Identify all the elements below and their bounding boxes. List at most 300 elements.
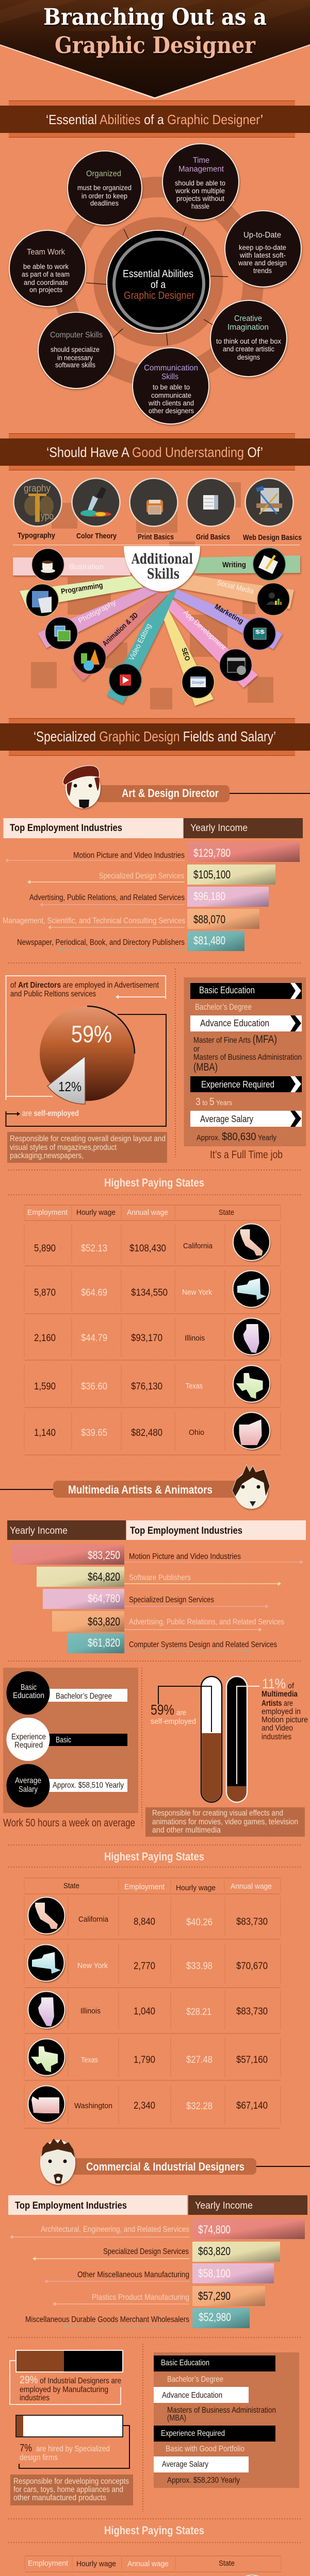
row: ohio: $82,480 xyxy=(131,1428,162,1438)
bar: computer systems: $61,820 xyxy=(88,1636,120,1649)
requirement: advance education: (MBA) xyxy=(193,1061,218,1073)
row: ohio: $39.65 xyxy=(81,1428,107,1438)
ability: computer skills xyxy=(38,312,115,388)
multimedia heading xyxy=(0,1465,270,1509)
tube: motion picture: and Video xyxy=(262,1724,293,1733)
bar chart: specialized firms share: design firms xyxy=(20,2453,58,2462)
table header: Yearly Income xyxy=(10,1526,68,1536)
row: california xyxy=(34,1224,271,1262)
skill: animation and 3d xyxy=(73,611,140,674)
skill: app development xyxy=(182,608,252,681)
ability: organized: must be organized xyxy=(77,184,132,192)
requirement: advance education xyxy=(154,2387,276,2422)
bar: software: Software Publishers xyxy=(129,1573,191,1582)
row: california: $83,730 xyxy=(236,1917,268,1927)
basics labels: Grid Basics xyxy=(196,533,230,541)
icon: grid basics xyxy=(187,478,235,527)
title: Branching Out as a xyxy=(43,4,267,30)
description box: commercial xyxy=(10,2475,133,2505)
bar: other manufacturing xyxy=(44,2263,274,2283)
bar: specialized design xyxy=(27,865,275,885)
ability: up-to-date: Up-to-Date xyxy=(243,231,281,240)
row: california: California xyxy=(183,1242,213,1250)
table header row: Hourly wage xyxy=(76,2560,116,2568)
icon: multimedia face xyxy=(232,1465,270,1509)
tube: motion picture xyxy=(226,1676,308,1802)
table header row: Hourly wage xyxy=(76,1208,116,1217)
table header: Yearly Income xyxy=(190,823,248,834)
tube: self-employed: 59% xyxy=(151,1702,174,1718)
icon: typography xyxy=(13,478,62,527)
description box: commercial: for cars, toys, home appliances and xyxy=(13,2485,123,2494)
note: working hours: Work 50 hours a week on average xyxy=(3,1817,135,1829)
bar chart: specialized firms share xyxy=(16,2415,129,2468)
section heading: good understanding: ‘Should Have A Good Understanding Of’ xyxy=(46,445,263,460)
ability: communication skills: communicate xyxy=(151,392,191,399)
requirement: salary: Approx. $58,510 Yearly xyxy=(53,1781,124,1790)
description box: art director xyxy=(7,1132,167,1163)
row: texas: 1,590 xyxy=(34,1381,56,1392)
row: texas: $27.48 xyxy=(186,2055,213,2065)
row: ohio: 1,140 xyxy=(34,1428,56,1438)
ability: computer skills: in necessary xyxy=(57,354,93,362)
bar: specialized design: Specialized Design Services xyxy=(99,872,184,880)
bar: motion picture: $129,780 xyxy=(193,846,231,859)
requirement: advance education: Masters of Business Administration xyxy=(167,2406,276,2415)
tube: self-employed: self-employed xyxy=(151,1717,196,1726)
ability: communication skills: other designers xyxy=(149,407,194,415)
bar: consulting: Management, Scientific, and Technical Consulting Services xyxy=(3,917,185,925)
table header row xyxy=(28,2559,235,2568)
basics icon row xyxy=(13,478,302,542)
description box: multimedia: Responsible for creating visual effects and xyxy=(152,1809,283,1818)
bar: publishers: Newspaper, Periodical, Book, and Directory Publishers xyxy=(17,938,185,947)
income table: commercial xyxy=(8,2195,307,2328)
ability: time management: should be able to xyxy=(175,179,225,187)
bar: specialized design xyxy=(43,1589,269,1609)
tube: motion picture: employed in xyxy=(262,1707,301,1716)
table header: Top Employment Industries xyxy=(15,2200,127,2211)
ability: creative imagination xyxy=(210,300,287,377)
requirement: salary: Average Salary xyxy=(200,1114,253,1124)
bar: wholesalers: Miscellaneous Durable Goods Merchant Wholesalers xyxy=(25,2315,189,2324)
income table: multimedia xyxy=(7,1520,306,1653)
ability: up-to-date: keep up-to-date xyxy=(239,244,286,251)
bar chart: manufacturing share: employed by Manufacturing xyxy=(20,2385,108,2394)
basics labels: Print Basics xyxy=(138,533,174,541)
requirement: salary: Approx. $80,630 Yearly xyxy=(197,1131,276,1143)
requirement: basic education xyxy=(190,983,302,1012)
ability: creative imagination: Imagination xyxy=(227,323,269,332)
requirement: experience: Experience Required xyxy=(201,1079,274,1090)
row: illinois: 1,040 xyxy=(134,2006,155,2017)
skill: seo: SEO xyxy=(180,647,191,662)
ability: team work xyxy=(9,230,86,307)
bar: specialized design: $105,100 xyxy=(193,868,231,881)
requirement: experience: Basic with Good Portfolio xyxy=(166,2445,244,2453)
ability: team work: Team Work xyxy=(27,248,65,257)
skill: app development: App Development xyxy=(182,608,227,652)
requirement: basic education: Basic Education xyxy=(161,2359,209,2367)
ability: up-to-date xyxy=(225,211,301,287)
row: illinois: $44.79 xyxy=(81,1333,107,1344)
table header row: Employment xyxy=(124,1883,165,1891)
requirements panel: multimedia xyxy=(3,1668,138,1813)
ability: time management: Management xyxy=(178,165,224,174)
requirement: experience: Experience xyxy=(11,1733,46,1741)
row: texas xyxy=(28,2039,268,2077)
requirement: basic education: Bachelor’s Degree xyxy=(195,1002,252,1012)
description box: commercial: other manufactured products xyxy=(13,2494,106,2502)
requirement: basic education: Basic Education xyxy=(199,985,255,995)
skill: seo xyxy=(180,647,215,699)
row: new york: $64.69 xyxy=(81,1287,107,1298)
section heading: essential abilities xyxy=(0,100,310,138)
requirement: advance education xyxy=(190,1015,302,1073)
row: new york: New York xyxy=(182,1288,212,1297)
bar: advertising xyxy=(29,887,269,907)
description box: multimedia: and other multimedia xyxy=(152,1826,221,1835)
bar: plastics xyxy=(53,2286,265,2306)
requirement: experience: 3 to 5 Years xyxy=(195,1096,232,1108)
additional skills hub: Additional xyxy=(131,551,193,567)
basics labels: Color Theory xyxy=(76,532,117,540)
icon: commercial face xyxy=(40,2139,75,2184)
requirement: experience: Basic xyxy=(56,1736,71,1744)
bar: motion picture: Motion Picture and Video Industries xyxy=(129,1552,241,1561)
requirement: salary: Approx. $58,230 Yearly xyxy=(167,2476,240,2485)
table header row: Annual wage xyxy=(231,1882,272,1891)
row: california xyxy=(35,2575,272,2576)
ability: up-to-date: ware and design xyxy=(238,259,287,267)
row: texas: $36.60 xyxy=(81,1381,107,1392)
row: new york: $134,550 xyxy=(131,1287,168,1298)
bar chart: specialized firms share: are hired by Specialized xyxy=(36,2445,110,2453)
icon: web design basics xyxy=(246,478,293,527)
ability: computer skills: Computer Skills xyxy=(50,331,103,340)
row: texas: Texas xyxy=(81,2056,98,2064)
bar: motion picture xyxy=(11,1544,303,1565)
table header xyxy=(3,818,303,838)
section heading: good understanding xyxy=(0,433,310,470)
row: illinois xyxy=(28,1992,268,2030)
row: new york: $70,670 xyxy=(236,1961,268,1972)
table: art director states xyxy=(24,1205,281,1455)
ability: organized: in order to keep xyxy=(81,192,127,200)
table header: Top Employment Industries xyxy=(130,1526,242,1536)
row: illinois xyxy=(34,1318,271,1357)
requirement: salary xyxy=(190,1111,302,1143)
table header: Yearly Income xyxy=(195,2200,253,2211)
bar: publishers xyxy=(17,931,244,952)
skill: animation and 3d: Animation & 3D xyxy=(101,611,140,648)
skill: photography: Photography xyxy=(77,599,118,625)
bar: advertising: Advertising, Public Relations, and Related Services xyxy=(129,1618,284,1626)
table header: Top Employment Industries xyxy=(10,823,122,834)
bar: other manufacturing: Other Miscellaneous Manufacturing xyxy=(77,2270,189,2279)
bar: wholesalers: $52,980 xyxy=(199,2311,231,2324)
bar: advertising: Advertising, Public Relations, and Related Services xyxy=(29,893,185,902)
row: new york xyxy=(28,1944,268,1983)
table header row: Employment xyxy=(27,1208,68,1217)
ability: time management: Time xyxy=(193,156,209,165)
skill: marketing xyxy=(213,603,275,650)
row: new york xyxy=(34,1270,271,1309)
skill: programming: Programming xyxy=(60,581,104,596)
ability: team work: and coordinate xyxy=(24,279,68,286)
row: texas: $76,130 xyxy=(131,1381,162,1392)
requirement: salary: Salary xyxy=(19,1785,38,1794)
ability: organized xyxy=(68,151,142,225)
ability: team work: be able to work xyxy=(23,263,69,270)
requirement: salary: Average Salary xyxy=(162,2460,208,2469)
heading: highest paying states: Highest Paying States xyxy=(104,1176,204,1189)
additional skills hub xyxy=(124,546,200,591)
row: washington: $67,140 xyxy=(236,2100,268,2111)
requirement: experience: Required xyxy=(14,1741,43,1750)
ability: communication skills xyxy=(133,348,209,424)
skill: writing: Writing xyxy=(222,561,246,569)
icon: print basics xyxy=(130,478,177,527)
icon: typography: graphy xyxy=(24,483,51,494)
description box: art director: visual styles of magazines,product xyxy=(10,1143,117,1152)
requirement: salary xyxy=(154,2456,249,2485)
ability: creative imagination: designs xyxy=(237,353,260,361)
tube: motion picture: Multimedia xyxy=(262,1690,298,1699)
ability: creative imagination: Creative xyxy=(234,314,262,323)
ability: communication skills: Skills xyxy=(161,372,178,381)
row: california: 5,890 xyxy=(34,1243,56,1254)
bar: specialized design xyxy=(32,2242,280,2262)
requirement: advance education: Advance Education xyxy=(200,1018,269,1028)
skill: marketing: Marketing xyxy=(213,603,245,625)
row: texas: $57,160 xyxy=(236,2055,268,2065)
section heading: specialized fields xyxy=(0,718,310,756)
description box: art director: Responsible for creating overall design layout and xyxy=(10,1134,166,1143)
tube chart: multimedia employment xyxy=(151,1676,308,1802)
bar chart: manufacturing share: industries xyxy=(20,2394,50,2402)
bar: specialized design: Specialized Design Services xyxy=(129,1596,214,1604)
ability: creative imagination: and create artistic xyxy=(223,345,274,353)
description box: art director: packaging,newspapers, xyxy=(10,1151,84,1160)
requirement: advance education: Master of Fine Arts (MFA) xyxy=(193,1033,277,1045)
row: washington: $32.28 xyxy=(186,2101,213,2112)
centre circle xyxy=(107,230,210,333)
pie chart: art directors employment: 59% xyxy=(71,1021,112,1047)
table header row xyxy=(27,1208,234,1217)
bar: advertising: $63,820 xyxy=(88,1615,120,1628)
ability: organized: Organized xyxy=(86,170,121,178)
art director heading xyxy=(63,766,310,808)
skill: seo: Google xyxy=(192,681,204,685)
row: new york: New York xyxy=(77,1961,108,1970)
centre circle: of a xyxy=(151,279,166,291)
tube: motion picture: 11% xyxy=(262,1676,286,1691)
description box: commercial: Responsible for developing concepts xyxy=(13,2477,129,2486)
row: california: $40.26 xyxy=(186,1917,213,1928)
table: multimedia states xyxy=(24,1878,281,2128)
table header xyxy=(7,1520,306,1540)
requirement: advance education: Advance Education xyxy=(162,2391,222,2400)
table header row: Employment xyxy=(28,2559,69,2568)
row: texas: Texas xyxy=(186,1382,203,1391)
requirement: experience xyxy=(190,1076,302,1108)
bar chart: manufacturing share xyxy=(10,2350,123,2404)
row: washington: Washington xyxy=(74,2102,112,2110)
tube: motion picture: of xyxy=(288,1682,295,1690)
ability: creative imagination: to think out of the box xyxy=(216,337,281,345)
icon: typography: ypo xyxy=(41,511,54,522)
art director heading: Art & Design Director xyxy=(122,787,219,800)
table header xyxy=(8,2195,307,2215)
requirement: experience: Experience Required xyxy=(161,2429,225,2438)
row: california: California xyxy=(78,1915,109,1924)
row: illinois: $83,730 xyxy=(236,2006,268,2017)
icon: colour theory xyxy=(72,478,120,527)
bar: publishers: $81,480 xyxy=(193,934,225,947)
requirement: basic education xyxy=(6,1671,127,1715)
basics labels xyxy=(18,531,302,542)
commercial heading xyxy=(40,2139,310,2184)
requirement: basic education xyxy=(154,2355,275,2384)
additional skills fan xyxy=(13,546,300,706)
row: washington xyxy=(28,2086,268,2124)
note: full time job: It’s a Full Time job xyxy=(210,1149,283,1161)
ribbons xyxy=(13,555,300,706)
ability: computer skills: should specialize xyxy=(51,346,100,353)
heading: highest paying states: Highest Paying States xyxy=(104,2524,204,2537)
requirements panel: commercial xyxy=(154,2352,299,2488)
skill: illustration xyxy=(32,548,104,581)
table: commercial states xyxy=(25,2556,281,2576)
ability: up-to-date: with latest soft- xyxy=(239,251,286,259)
requirement: advance education: or xyxy=(193,1045,200,1054)
skill: illustration: Illustration xyxy=(69,563,104,571)
requirement: advance education: (MBA) xyxy=(167,2414,186,2422)
requirements panel: art director xyxy=(184,977,306,1146)
bar: advertising: $96,180 xyxy=(193,890,225,903)
pie chart: art directors employment: 12% xyxy=(58,1079,81,1094)
ability: time management: projects without xyxy=(176,195,224,202)
multimedia heading: Multimedia Artists & Animators xyxy=(68,1483,213,1496)
commercial heading: Commercial & Industrial Designers xyxy=(86,2160,244,2173)
centre circle: Essential Abilities xyxy=(123,268,193,280)
bar: plastics: $57,290 xyxy=(198,2290,231,2302)
requirement: basic education: Bachelor’s Degree xyxy=(167,2375,223,2384)
table header row: State xyxy=(63,1882,79,1890)
header banner xyxy=(0,0,310,99)
centre circle: Graphic Designer xyxy=(124,290,194,301)
skill: programming xyxy=(26,581,104,616)
skill: writing xyxy=(222,548,286,580)
row: ohio: Ohio xyxy=(189,1428,204,1437)
bar: consulting: $88,070 xyxy=(193,913,225,926)
row: california xyxy=(28,1897,268,1936)
skill: marketing: $$ xyxy=(255,629,265,635)
requirement: salary xyxy=(6,1764,127,1807)
requirement: basic education: Basic xyxy=(21,1683,37,1692)
pie chart: art directors employment: of Art Directors are employed in Advertisement xyxy=(10,981,159,990)
pie chart: art directors employment xyxy=(6,976,166,1126)
icon: art director face xyxy=(63,766,100,808)
row: new york: $33.98 xyxy=(186,1961,213,1972)
row: illinois: Illinois xyxy=(185,1334,205,1343)
ability: up-to-date: trends xyxy=(253,267,272,275)
pie chart: art directors employment: are self-employed xyxy=(22,1109,79,1118)
ability: communication skills: to be able to xyxy=(153,383,190,391)
table header row: State xyxy=(219,2559,235,2568)
title: Graphic Designer xyxy=(55,32,256,59)
additional skills hub: Skills xyxy=(147,566,180,582)
bar: advertising xyxy=(52,1611,284,1632)
bar: motion picture: Motion Picture and Video Industries xyxy=(73,851,185,860)
ability: time management xyxy=(162,144,239,220)
bar: architectural xyxy=(10,2219,305,2239)
row: ohio xyxy=(34,1413,271,1451)
bar: other manufacturing: $58,100 xyxy=(198,2267,231,2280)
table header row: Annual wage xyxy=(127,2560,169,2568)
ability: team work: as part of a team xyxy=(22,270,70,278)
row: illinois: $93,170 xyxy=(131,1333,162,1344)
requirement: salary: Average xyxy=(15,1776,41,1785)
tube: self-employed xyxy=(151,1676,222,1802)
income table: art director xyxy=(3,818,303,952)
section heading: essential abilities: ‘Essential Abilities of a Graphic Designer’ xyxy=(46,112,263,127)
ability: time management: work on multiple xyxy=(175,187,225,195)
bar chart: manufacturing share: 29% of Industrial Designers are xyxy=(20,2374,121,2386)
bar: plastics: Plastics Product Manufacturing xyxy=(92,2293,189,2302)
row: new york: 5,870 xyxy=(34,1287,56,1298)
bar: computer systems xyxy=(67,1633,277,1653)
bar: software: $64,820 xyxy=(88,1570,120,1583)
skill: social media xyxy=(216,579,290,615)
requirement: basic education: Bachelor’s Degree xyxy=(56,1692,112,1701)
bar: wholesalers xyxy=(25,2308,250,2328)
row: illinois: 2,160 xyxy=(34,1333,56,1344)
requirement: experience xyxy=(6,1718,127,1761)
section heading: specialized fields: ‘Specialized Graphic Design Fields and Salary’ xyxy=(34,728,276,744)
tube: motion picture: Artists are xyxy=(262,1699,293,1708)
row: texas: 1,790 xyxy=(134,2055,155,2065)
table header row: State xyxy=(219,1208,234,1217)
bar: specialized design: $63,820 xyxy=(198,2245,231,2258)
bar: consulting xyxy=(3,909,259,929)
table header row xyxy=(63,1882,272,1892)
tube: self-employed: are xyxy=(176,1708,186,1717)
table header row: Hourly wage xyxy=(176,1884,216,1892)
ability: time management: hassle xyxy=(191,202,209,210)
basics labels: Typography xyxy=(18,531,56,540)
heading: highest paying states: Highest Paying States xyxy=(104,1850,204,1863)
ability: communication skills: with clients and xyxy=(148,399,194,407)
title xyxy=(43,4,267,59)
bar: architectural: $74,800 xyxy=(198,2223,231,2236)
row: texas xyxy=(34,1365,271,1404)
row: washington: 2,340 xyxy=(134,2100,155,2111)
skill: photography xyxy=(45,599,118,649)
row: california: $52.13 xyxy=(81,1243,107,1254)
bar: specialized design: Specialized Design Services xyxy=(103,2247,189,2256)
skill: social media: Social Media xyxy=(216,579,255,596)
tube: motion picture: industries xyxy=(262,1733,291,1741)
row: california: 8,840 xyxy=(134,1917,155,1927)
bar chart: specialized firms share: 7% xyxy=(20,2443,32,2454)
ability: communication skills: Communication xyxy=(144,364,198,372)
ability: organized: deadlines xyxy=(90,199,119,207)
skill: video editing: Video Editing xyxy=(127,622,153,662)
bar: software xyxy=(37,1567,281,1587)
requirement: experience xyxy=(154,2426,275,2453)
